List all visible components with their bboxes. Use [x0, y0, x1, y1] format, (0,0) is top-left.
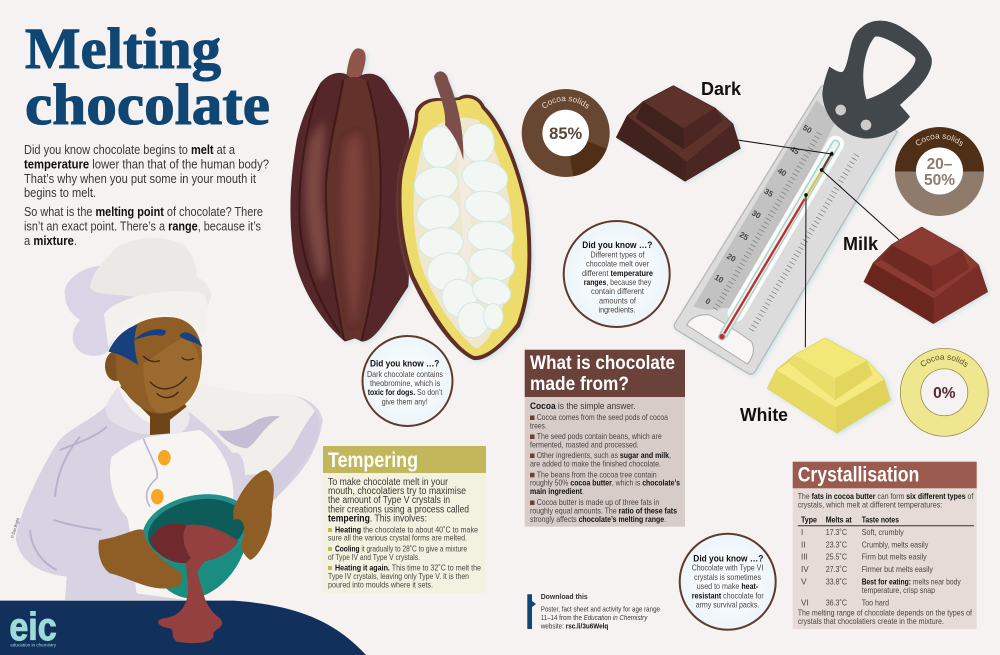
illustration credit: © Dan Bright: [9, 517, 21, 539]
scale ticks: [715, 133, 857, 332]
scale numbers: [704, 123, 814, 307]
did you know: dark chocolate and dogs: theobromine, which is: [370, 379, 440, 388]
panel text: Cocoa comes from the seed pods of cocoa: [537, 413, 668, 422]
chocolate piece: dark: [617, 86, 740, 181]
crystal types table: 23.3˚C: [826, 539, 847, 549]
did you know: temperature ranges: ranges, because they: [584, 278, 652, 287]
did you know: temperature ranges: chocolate melt over: [586, 260, 649, 269]
panel text: roughly equal amounts. The ratio of these fats: [530, 506, 677, 515]
tempering intro: tempering. This involves:: [328, 514, 427, 524]
did you know: dark chocolate and dogs: give them any!: [382, 397, 428, 406]
crystal types table: III: [801, 553, 808, 562]
intro text: temperature lower than that of the human body?: [24, 156, 269, 172]
thermometer handle: [822, 21, 932, 139]
did you know: temperature ranges: ingredients.: [598, 306, 636, 315]
panel: tempering: [323, 446, 486, 593]
scale numbers: 20: [725, 252, 738, 264]
panel header: [525, 350, 685, 397]
closed cocoa pod: [290, 48, 411, 342]
tempering steps: sure all the various crystal forms are melted.: [328, 534, 467, 543]
donut: milk chocolate cocoa solids: [895, 127, 984, 216]
eic logo: eic: [9, 605, 57, 649]
did you know: temperature ranges: contain different: [591, 287, 645, 296]
crystal types table: I: [801, 528, 803, 537]
tempering intro: the amount of Type V crystals in: [328, 495, 450, 506]
tempering steps: poured into moulds where it sets.: [328, 580, 433, 589]
illustration: chef pouring chocolate: [0, 238, 366, 655]
donut: white chocolate cocoa solids: Cocoa solids: [920, 355, 968, 367]
glass slot and tube: [723, 144, 836, 335]
donut: milk chocolate cocoa solids: Cocoa solids: [916, 134, 963, 146]
did you know: type VI crystals: Did you know …?: [693, 554, 763, 564]
crystallisation header: [793, 462, 977, 488]
tempering intro: To make chocolate melt in your: [328, 477, 449, 488]
label: Milk: Milk: [843, 233, 879, 254]
crystallisation closing text: crystals that chocolatiers create in the mixture.: [798, 617, 944, 626]
did you know: type VI crystals: resistant chocolate for: [692, 591, 764, 600]
tempering steps: Heating the chocolate to about 40˚C to make: [335, 525, 478, 535]
donut: milk chocolate cocoa solids: 20–: [927, 156, 953, 173]
donut: dark chocolate cocoa solids: Cocoa solids: [542, 96, 590, 108]
crystal types table: 36.3˚C: [826, 597, 847, 607]
panel: what is chocolate made from: [525, 350, 685, 527]
crystal types table: 27.3˚C: [826, 564, 847, 574]
tempering header: [323, 446, 486, 473]
tempering intro: [328, 477, 469, 524]
chef coat: [16, 383, 323, 600]
did you know: temperature ranges: Different types of: [590, 250, 645, 259]
chocolate piece: white: [768, 338, 890, 433]
crystallisation intro: The fats in cocoa butter can form six different types of: [798, 492, 974, 501]
crystal types table: Taste notes: [862, 515, 899, 524]
intro text: a mixture.: [24, 233, 77, 248]
did you know: temperature ranges: [564, 221, 670, 327]
panel heading: What is chocolate: [530, 352, 675, 374]
scale numbers: 50: [801, 123, 814, 136]
donut: dark chocolate cocoa solids: 85%: [549, 125, 583, 143]
did you know: dark chocolate and dogs: [362, 336, 452, 426]
thermometer: [674, 21, 932, 374]
panel text: strongly affects chocolate’s melting range.: [530, 515, 666, 524]
cocoa beans: [411, 123, 517, 338]
crystal types table: Firmer but melts easily: [862, 565, 934, 574]
did you know: type VI crystals: used to make heat-: [697, 582, 759, 591]
title: chocolate: [25, 72, 270, 137]
did you know: type VI crystals: crystals is sometimes: [694, 573, 761, 582]
crystal types table: 33.8˚C: [826, 576, 847, 586]
crystal types table: temperature, crisp snap: [862, 586, 935, 595]
crystal types table: Melts at: [826, 515, 852, 524]
label: Dark: Dark: [701, 78, 742, 99]
crystal types table: 17.3˚C: [826, 527, 847, 537]
open cocoa pod: [397, 71, 531, 360]
did you know: type VI crystals: Chocolate with Type VI: [692, 564, 763, 573]
panel text: trees.: [530, 421, 547, 430]
did you know: dark chocolate and dogs: Dark chocolate contains: [367, 370, 443, 379]
donut: white chocolate cocoa solids: [900, 348, 989, 437]
intro text: So what is the melting point of chocolate? There: [24, 204, 263, 219]
crystal types table: 25.5˚C: [826, 552, 847, 562]
crystal types table: IV: [801, 565, 809, 574]
title: Melting: [25, 16, 221, 81]
scale numbers: 25: [738, 230, 750, 243]
chocolate piece: milk: [864, 227, 987, 323]
panel text: main ingredient.: [530, 487, 584, 496]
crystallisation intro: [798, 492, 974, 509]
table: [0, 601, 366, 655]
bowl: [136, 485, 258, 598]
scale numbers: 40: [776, 166, 788, 179]
crystallisation closing text: The melting range of chocolate depends on the types of: [798, 608, 973, 617]
did you know: type VI crystals: [680, 534, 776, 630]
scale numbers: 45: [788, 144, 801, 157]
download this note: Download this: [541, 592, 588, 601]
leader lines: [737, 140, 900, 347]
tempering steps: [328, 525, 481, 589]
crystallisation intro: crystals, which melt at different temperatures:: [798, 500, 942, 509]
illustration: cocoa pods: [290, 48, 531, 360]
panel text: roughly 50% cocoa butter, which is chocolate’s: [530, 479, 680, 488]
donut: white chocolate cocoa solids: 0%: [933, 385, 956, 402]
crystal types table: [798, 515, 974, 607]
chocolate stream: [158, 552, 222, 643]
tempering steps: Heating it again. This time to 32˚C to melt the: [335, 563, 481, 573]
did you know: temperature ranges: Did you know …?: [582, 240, 652, 250]
download this note: website: rsc.li/3u6Welq: [540, 622, 608, 630]
intro text: Did you know chocolate begins to melt at a: [24, 142, 236, 157]
intro text: That’s why when you put some in your mouth it: [24, 171, 256, 186]
coat buttons: [151, 450, 171, 504]
download this note: [527, 592, 660, 630]
download this note: 11–14 from the Education in Chemistry: [541, 613, 648, 622]
thermometer bulb: [719, 333, 725, 340]
tempering steps: of Type IV and Type V crystals.: [328, 553, 420, 562]
tempering steps: Cooling it gradually to 28˚C to give a mixture: [335, 544, 467, 554]
download this note: Poster, fact sheet and activity for age range: [541, 605, 660, 614]
did you know: temperature ranges: amounts of: [599, 297, 637, 306]
crystal types table: Too hard: [862, 598, 889, 607]
thermometer plate: [674, 85, 897, 374]
tempering heading: Tempering: [328, 449, 418, 472]
tempering intro: their creations using a process called: [328, 504, 469, 516]
did you know: dark chocolate and dogs: Did you know …?: [370, 359, 439, 369]
crystal types table: VI: [801, 598, 809, 607]
donut: dark chocolate cocoa solids: [522, 89, 610, 177]
crystal types table: II: [801, 540, 806, 549]
tempering intro: mouth, chocolatiers try to maximise: [328, 486, 466, 497]
donut: milk chocolate cocoa solids: 50%: [924, 172, 955, 189]
panel: crystallisation: [793, 462, 977, 629]
eic logo: education in chemistry: [10, 643, 57, 648]
hands: [98, 470, 274, 588]
panel heading: [530, 352, 675, 395]
crystallisation heading: Crystallisation: [798, 464, 919, 487]
scale numbers: 30: [750, 208, 763, 221]
scale numbers: 0: [704, 296, 713, 307]
chef hat: [65, 238, 211, 356]
crystal types table: V: [801, 577, 807, 586]
panel text: Other ingredients, such as sugar and milk,: [537, 451, 671, 460]
panel text: Cocoa butter is made up of three fats in: [537, 498, 660, 507]
intro text: [24, 142, 269, 248]
title: [25, 16, 270, 137]
crystal types table: Soft, crumbly: [862, 528, 904, 537]
panel text: fermented, roasted and processed.: [530, 440, 639, 449]
panel text: The seed pods contain beans, which are: [537, 432, 662, 441]
scale numbers: 10: [713, 273, 725, 285]
crystal types table: Best for eating: melts near body: [862, 577, 961, 586]
scale numbers: 35: [762, 187, 775, 199]
neck and head: [105, 317, 203, 435]
panel text: Cocoa is the simple answer.: [530, 401, 636, 412]
panel text: are added to make the finished chocolate.: [530, 460, 661, 469]
crystal types table: Firm but melts easily: [862, 553, 927, 562]
did you know: temperature ranges: different temperature: [582, 269, 653, 278]
label: White: White: [740, 404, 788, 425]
panel text: [530, 401, 680, 524]
panel heading: made from?: [530, 373, 629, 395]
crystal types table: Crumbly, melts easily: [862, 540, 929, 549]
panel text: The beans from the cocoa tree contain: [537, 470, 657, 479]
intro text: isn’t an exact point. There’s a range, because it’s: [24, 218, 261, 234]
crystallisation closing text: [798, 608, 973, 626]
did you know: dark chocolate and dogs: toxic for dogs. So don’t: [368, 388, 443, 397]
did you know: type VI crystals: army survival packs.: [696, 601, 759, 610]
tempering steps: Type IV crystals, leaving only Type V. It is then: [328, 572, 469, 581]
crystal types table: Type: [801, 515, 817, 524]
intro text: begins to melt.: [24, 185, 96, 200]
